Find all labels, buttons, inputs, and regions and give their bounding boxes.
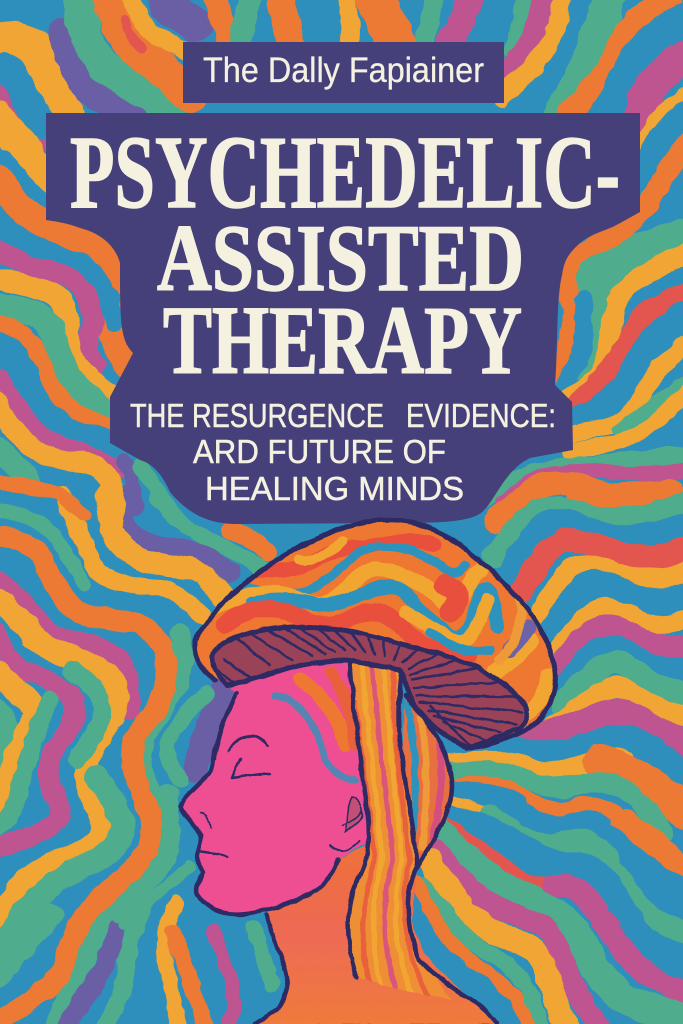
masthead panel <box>183 42 504 103</box>
title text: ASSISTED <box>157 205 524 311</box>
masthead text: The Dally Fapiainer <box>203 51 484 90</box>
ear <box>345 797 363 832</box>
facial features <box>200 736 362 857</box>
title panel <box>46 113 640 524</box>
hair column <box>348 660 452 1000</box>
temple hair streaks <box>275 672 355 780</box>
subtitle text: HEALING MINDS <box>205 470 464 507</box>
subtitle text: ARD FUTURE OF <box>193 433 446 470</box>
figure: profile with mushroom cap <box>180 520 555 1024</box>
mushroom cap <box>194 520 555 748</box>
back hair <box>402 698 450 860</box>
subtitle text <box>130 397 556 507</box>
outlines of head and hair <box>180 662 497 1024</box>
subtitle text: THE RESURGENCE <box>130 397 384 434</box>
neck and shoulders <box>255 843 500 1024</box>
mushroom gills <box>212 627 527 748</box>
title text <box>70 115 620 395</box>
title text: THERAPY <box>163 287 522 395</box>
subtitle text: EVIDENCE: <box>406 397 556 434</box>
face <box>180 662 368 914</box>
